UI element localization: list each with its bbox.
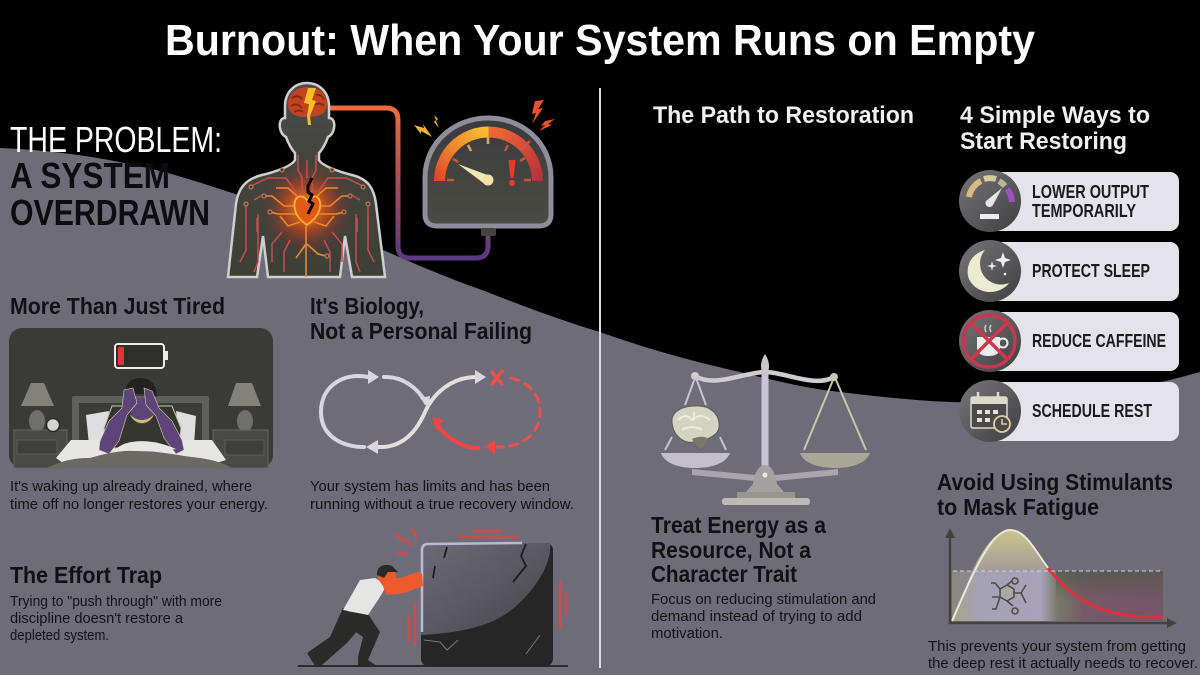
post <box>762 372 768 470</box>
arm <box>377 572 423 595</box>
heading: the problem: THE PROBLEM: <box>10 119 222 160</box>
item: lower output <box>959 170 1179 232</box>
red X <box>492 371 502 384</box>
strain marks <box>395 529 566 645</box>
icon: balance scale with brain <box>661 354 870 505</box>
caption: focus <box>651 591 876 642</box>
heading: 4 simple ways <box>960 102 1150 155</box>
hair <box>377 565 398 578</box>
wire connecting body to gauge <box>330 108 488 258</box>
heart <box>294 196 320 225</box>
icon: crossed-out coffee <box>959 310 1021 372</box>
bolt left <box>414 115 439 137</box>
heading: more than just tired: More Than Just Tired <box>10 293 225 319</box>
picture: awake in bed with empty battery <box>9 328 273 468</box>
tick marks <box>447 137 531 180</box>
item: reduce caffeine: REDUCE CAFFEINE <box>1032 331 1166 351</box>
item: protect sleep <box>959 240 1179 302</box>
beam <box>695 372 834 381</box>
heading: the effort trap: The Effort Trap <box>10 562 162 588</box>
right pan <box>800 453 870 468</box>
base <box>692 469 838 481</box>
icon: human body with circuit heart <box>228 83 385 277</box>
heading: biology: It's Biology, <box>310 293 424 319</box>
heading: path to restoration: The Path to Restoration <box>653 102 914 129</box>
rising curve <box>952 530 1048 621</box>
caption: waking up drained: time off no longer restores your energy. <box>10 496 268 513</box>
needle <box>458 164 494 186</box>
heading: avoid stimulants: to Mask Fatigue <box>937 494 1099 520</box>
connector stem <box>481 228 496 236</box>
right cords <box>804 380 866 450</box>
caption: focus: motivation. <box>651 625 723 642</box>
brain <box>672 406 719 449</box>
heading: biology: Not a Personal Failing <box>310 318 532 344</box>
heading: 4 simple ways: 4 Simple Ways to <box>960 102 1150 129</box>
shirt <box>343 578 387 615</box>
heading: treat energy <box>651 512 826 587</box>
heart glow <box>259 160 355 256</box>
red arrowheads <box>432 417 495 454</box>
item: schedule rest: SCHEDULE REST <box>1032 401 1152 421</box>
white loop <box>321 376 476 447</box>
red dashed return <box>497 378 540 447</box>
heading: treat energy: Treat Energy as a <box>651 512 826 538</box>
title: Burnout: When Your System Runs on Empty <box>165 16 1035 65</box>
heading: avoid stimulants <box>937 469 1173 520</box>
icon: calendar with clock <box>959 380 1021 442</box>
axes <box>950 534 1170 623</box>
caption: system limits: Your system has limits and has been <box>310 478 550 495</box>
heading: 4 simple ways: Start Restoring <box>960 128 1127 155</box>
molecule icon <box>991 578 1026 614</box>
item: protect sleep: PROTECT SLEEP <box>1032 261 1150 281</box>
ground line <box>298 665 568 667</box>
icon: speedometer <box>959 170 1021 232</box>
heading: avoid stimulants: Avoid Using Stimulants <box>937 469 1173 495</box>
caption: effort trap: Trying to "push through" with more <box>10 593 222 610</box>
brain <box>288 87 327 125</box>
divider <box>599 88 601 668</box>
item: schedule rest <box>959 380 1179 442</box>
caption: effort trap <box>10 593 222 644</box>
headboard <box>72 396 209 448</box>
diagram: broken infinity recovery loop <box>321 370 540 454</box>
sheets <box>56 440 226 468</box>
left pan <box>661 453 730 468</box>
person <box>99 378 184 454</box>
bolt right <box>532 100 555 131</box>
caption: waking up drained: It's waking up already drained, where <box>10 478 252 495</box>
left lamp <box>14 383 67 468</box>
circuit lines outer <box>240 155 374 272</box>
rear leg <box>307 608 365 666</box>
item: lower output: TEMPORARILY <box>1032 201 1136 221</box>
caption: prevents deep rest: the deep rest it actually needs to recover. <box>928 655 1198 672</box>
pillows <box>86 411 196 445</box>
caption: waking up drained <box>10 478 268 513</box>
gap left of rising curve <box>952 571 972 621</box>
heading: the problem <box>10 119 222 233</box>
caption: effort trap: discipline doesn't restore a <box>10 610 184 627</box>
right lamp <box>213 383 268 468</box>
blanket <box>47 451 232 468</box>
shaded area below threshold <box>952 571 1163 621</box>
battery icon <box>115 344 168 368</box>
head <box>378 567 396 585</box>
heading: treat energy: Character Trait <box>651 561 797 587</box>
white fold over lap <box>116 441 176 451</box>
white arrowheads <box>366 370 486 454</box>
boulder block <box>421 543 553 666</box>
front leg <box>350 612 380 666</box>
caption: prevents deep rest: This prevents your system from getting <box>928 638 1186 655</box>
left cords <box>665 378 726 450</box>
illustration: man pushing boulder <box>298 529 568 667</box>
heading: biology <box>310 293 532 344</box>
heading: the problem: OVERDRAWN <box>10 192 210 233</box>
circuit lines inner orange <box>264 188 350 277</box>
arc: red segment <box>488 132 538 181</box>
caption: system limits <box>310 478 574 513</box>
item: reduce caffeine <box>959 310 1179 372</box>
caption: effort trap: depleted system. <box>10 627 109 644</box>
man <box>307 565 423 666</box>
grey wave background <box>0 148 1200 675</box>
heading: treat energy: Resource, Not a <box>651 537 811 563</box>
caption: focus: demand instead of trying to add <box>651 608 862 625</box>
icon: overload gauge <box>414 100 555 236</box>
falling red curve <box>1048 568 1163 617</box>
red solid return <box>436 424 478 448</box>
icon: moon and stars <box>959 240 1021 302</box>
hump above threshold <box>972 530 1048 571</box>
dashed threshold <box>953 570 1163 572</box>
warning exclamation <box>508 160 516 186</box>
caption: system limits: running without a true recovery window. <box>310 496 574 513</box>
caption: prevents deep rest <box>928 638 1198 672</box>
olive band at top right <box>1056 571 1163 621</box>
crack <box>308 178 313 214</box>
circuit nodes <box>244 168 370 258</box>
caption: focus: Focus on reducing stimulation and <box>651 591 876 608</box>
item: lower output: LOWER OUTPUT <box>1032 182 1149 202</box>
arc: orange to yellow <box>440 132 488 181</box>
heading: the problem: A SYSTEM <box>10 155 170 196</box>
chart: stimulant energy crash curve <box>945 528 1177 628</box>
